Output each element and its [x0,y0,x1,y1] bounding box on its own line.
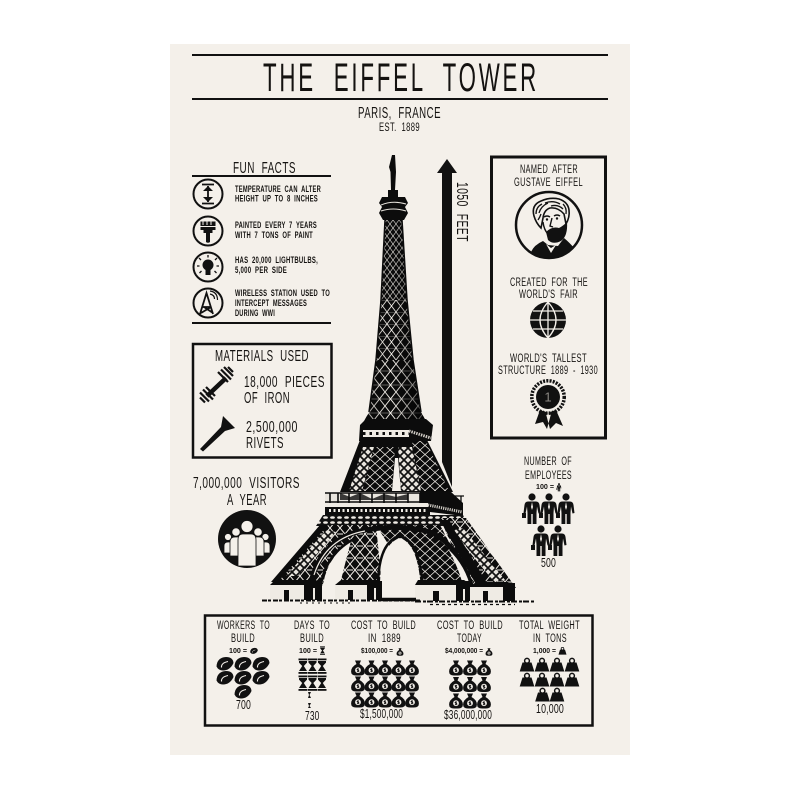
heading: employees: EMPLOYEES [525,470,572,482]
heading: cost 1889 [351,620,416,645]
second platform [359,419,433,441]
heading: days [294,620,330,645]
icon: portrait of gustave eiffel [516,192,582,258]
text: worlds fair: CREATED FOR THE [510,277,588,289]
heading: cost today [437,620,503,645]
arches [311,527,472,592]
panel: visitors [193,475,300,568]
heading: days: DAYS TO [294,620,330,632]
text: named after [514,164,583,189]
text: visitors [193,475,300,509]
icon: light bulb [194,252,222,282]
pictogram: money bags today [449,660,491,708]
arrow: height [437,159,457,487]
heading: workers: BUILD [231,633,255,645]
icon: temperature height [194,180,222,208]
panel: right facts [492,157,606,438]
subtitle: location: PARIS, FRANCE [358,105,441,122]
heading: fun facts: FUN FACTS [233,160,296,177]
pictogram: helmets [216,657,270,698]
title: THE EIFFEL TOWER [263,56,539,100]
lower legs lattice [270,515,516,588]
legend: cost 1889: $100,000 = [361,648,393,655]
pictogram: hourglasses [298,658,326,708]
value: 700: 700 [236,698,251,712]
heading: materials: MATERIALS USED [215,348,309,365]
icon: award rosette [532,381,564,429]
pictogram: employees [522,493,574,556]
pictogram: weights [520,658,579,702]
middle section legs [340,440,453,492]
fact: paint [235,220,317,241]
icon: globe [530,302,566,338]
column: workers to build [216,620,270,712]
column: total weight [519,620,580,716]
heading: employees [524,456,572,482]
legend: cost today: $4,000,000 = [445,648,483,655]
fact: paint: PAINTED EVERY 7 YEARS [235,220,317,231]
fact: lightbulbs: HAS 20,000 LIGHTBULBS, [235,255,318,266]
fact: wireless: DURING WWI [235,308,275,319]
first platform [325,491,464,516]
heading: weight: TOTAL WEIGHT [519,620,580,632]
column: cost today [437,620,503,722]
column: days to build [294,620,330,723]
illustration: eiffel tower [262,155,535,604]
heading: cost 1889: COST TO BUILD [351,620,416,632]
heading: workers [217,620,270,645]
heading: cost today: COST TO BUILD [437,620,503,632]
fact: lightbulbs [235,255,318,276]
text: named after: GUSTAVE EIFFEL [514,177,583,189]
text: rivets: 2,500,000 [246,419,298,436]
value: 500: 500 [541,556,556,570]
panel: bottom statistics [205,616,592,726]
column: cost in 1889 [351,620,419,721]
legend: weight: 1,000 = [533,648,556,655]
heading: weight [519,620,580,645]
fact: wireless: INTERCEPT MESSAGES [235,298,307,309]
legend: workers: 100 = [229,648,247,655]
panel: fun facts [192,160,331,324]
fact: temperature: HEIGHT UP TO 8 INCHES [235,194,318,204]
panel: materials used [193,344,332,458]
text: visitors: A YEAR [227,492,267,509]
icon: award rosette: 1 [544,390,552,404]
value: 10,000: 10,000 [536,702,564,716]
text: visitors: 7,000,000 VISITORS [193,475,300,492]
legend: days: 100 = [299,648,317,655]
text: iron pieces: OF IRON [244,390,290,407]
text: tallest [498,353,598,377]
fact: lightbulbs: 5,000 PER SIDE [235,265,287,276]
label: 1050 feet: 1050 FEET [453,182,470,242]
upper shaft [363,220,427,423]
heading: days: BUILD [300,633,324,645]
heading: cost today: TODAY [457,633,482,645]
subtitle: established: EST. 1889 [379,122,420,134]
icon: paint brush [194,216,222,246]
ground [262,600,535,604]
icon: wireless antenna [194,288,222,318]
text: iron pieces: 18,000 PIECES [244,374,325,391]
icon: crowd [218,510,276,568]
icon: rivet [200,416,235,452]
foot piers [270,580,515,601]
heading: weight: IN TONS [533,633,567,645]
heading: cost 1889: IN 1889 [368,633,401,645]
background sheet [170,44,630,755]
spire [379,155,408,220]
fact: temperature: TEMPERATURE CAN ALTER [235,184,321,195]
text: worlds fair: WORLD'S FAIR [519,289,578,301]
value: 730: 730 [305,709,320,723]
text: tallest: WORLD'S TALLEST [510,353,587,365]
pictogram: money bags 1889 [351,660,419,708]
fact: temperature [235,184,321,204]
text: tallest: STRUCTURE 1889 - 1930 [498,365,598,377]
heading: workers: WORKERS TO [217,620,270,632]
value: 1.5 million: $1,500,000 [360,707,403,721]
fact: wireless: WIRELESS STATION USED TO [235,288,330,299]
value: 36 million: $36,000,000 [444,708,492,722]
icon: dumbbell [200,367,233,402]
panel: number of employees [522,456,574,570]
text: rivets: RIVETS [246,435,284,452]
fact: paint: WITH 7 TONS OF PAINT [235,230,313,241]
text: rivets [246,419,298,452]
text: iron pieces [244,374,325,407]
text: named after: NAMED AFTER [520,164,578,176]
text: worlds fair [510,277,588,301]
heading: employees: NUMBER OF [524,456,572,468]
legend: employees: 100 = [536,484,554,491]
fact: wireless [235,288,330,319]
